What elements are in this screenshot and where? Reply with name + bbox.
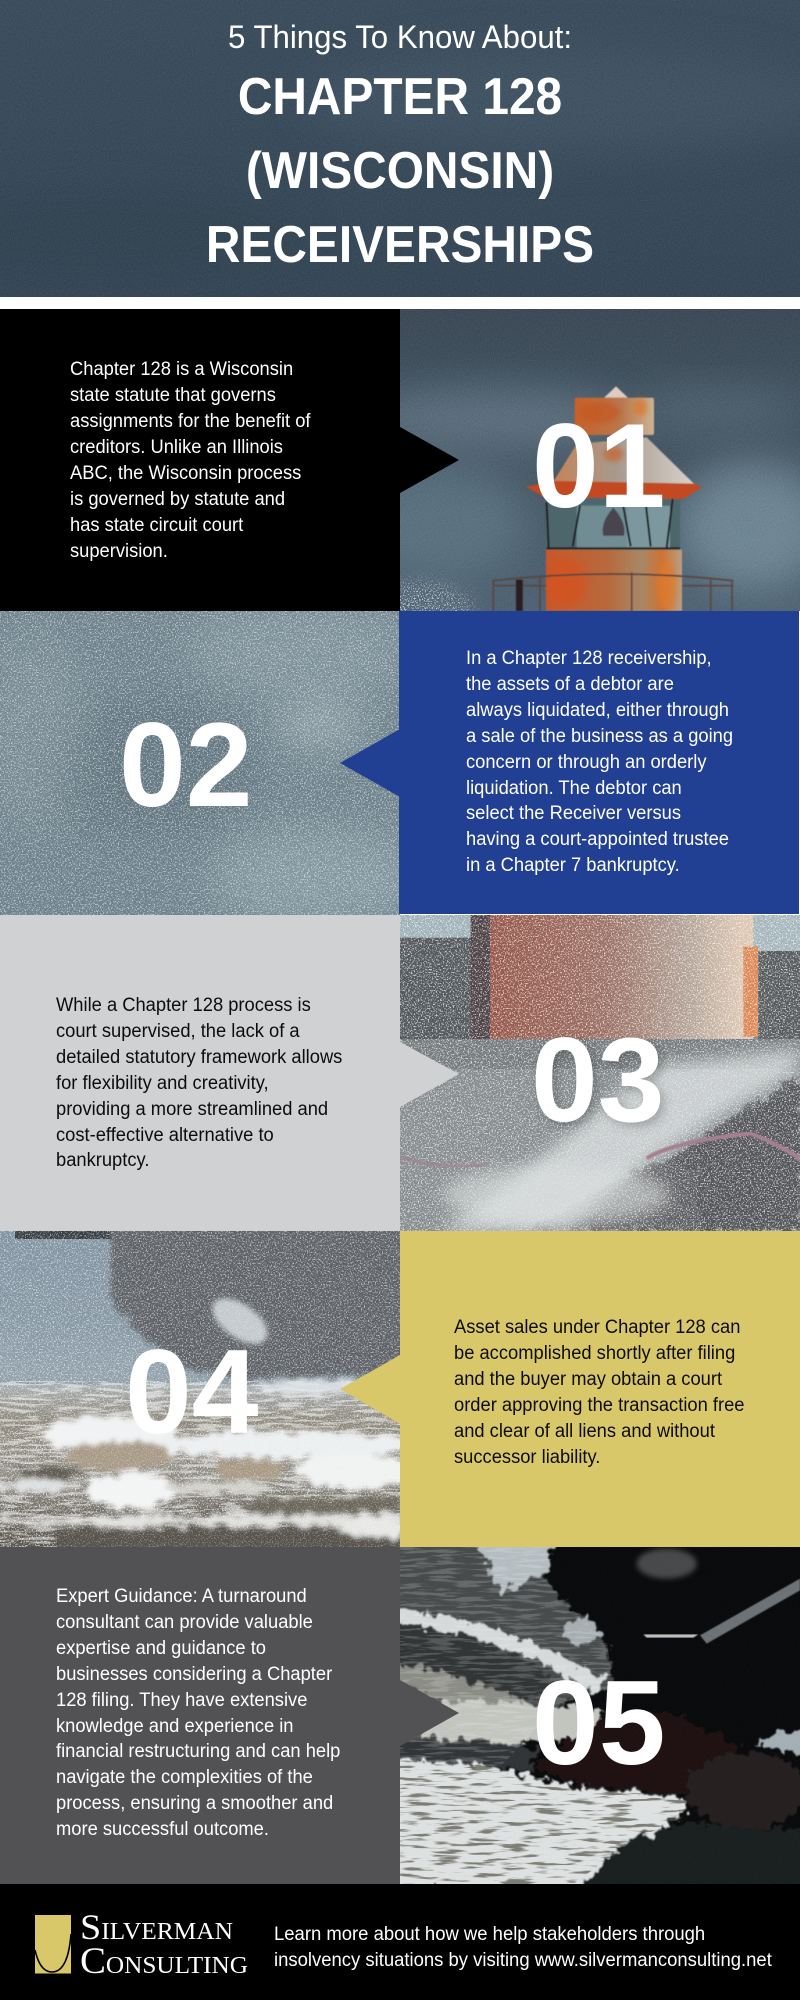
body text 05: 128 filing. They have extensive [56,1690,307,1711]
number 02: 02 [119,698,252,832]
title [206,68,594,274]
body text 04: be accomplished shortly after filing [454,1343,735,1364]
photo: rocks and white water [400,1547,800,1884]
body text 01: ABC, the Wisconsin process [70,463,301,484]
text box 03 [0,915,400,1231]
number 04: 04 [125,1325,258,1459]
footer [0,1884,800,2000]
body text 05: financial restructuring and can help [56,1741,340,1762]
body text 01: state statute that governs [70,385,276,406]
body text 05: process, ensuring a smoother and [56,1793,333,1814]
panel 04 [0,1231,800,1973]
body text 03: for flexibility and creativity, [56,1073,269,1094]
panel 03 [0,915,800,1231]
title: CHAPTER 128 [238,68,562,126]
number 01: 01 [532,399,665,533]
arrow 04 [340,1355,400,1424]
header banner [0,0,800,297]
body text 05: businesses considering a Chapter [56,1664,332,1685]
foam and waves [0,1379,413,1551]
text box 05 [0,1547,400,1884]
body text 02: liquidation. The debtor can [466,778,682,799]
subtitle: 5 Things To Know About: [228,19,572,55]
lighthouse [493,386,733,611]
panel 01 [0,309,800,611]
body text 01: has state circuit court [70,515,243,536]
photo: lighthouse base in spray [400,915,800,1231]
body text 04: order approving the transaction free [454,1395,744,1416]
body text 02: always liquidated, either through [466,700,729,721]
arrow 02 [340,730,399,796]
body text 02: a sale of the business as a going [466,726,733,747]
body text 04: and the buyer may obtain a court [454,1369,722,1390]
photo: waves at tower foot [0,1231,400,1973]
body text 02: the assets of a debtor are [466,674,674,695]
arrow 01 [400,427,459,493]
logo: Silverman Consulting [35,1910,248,1978]
body text 01: is governed by statute and [70,489,285,510]
body text 01 [70,359,311,562]
body text 03: While a Chapter 128 process is [56,995,311,1016]
body text 02: having a court-appointed trustee [466,829,729,850]
body text 02: In a Chapter 128 receivership, [466,648,712,669]
body text 05: knowledge and experience in [56,1716,294,1737]
body text 03: detailed statutory framework allows [56,1047,342,1068]
body text 04: and clear of all liens and without [454,1421,715,1442]
body text 03: court supervised, the lack of a [56,1021,300,1042]
call to action [274,1924,772,1971]
arrow 03 [400,1042,459,1107]
text box 04 [400,1231,800,1547]
body text 03: cost-effective alternative to [56,1125,274,1146]
body text 05: consultant can provide valuable [56,1612,313,1633]
body text 05: Expert Guidance: A turnaround [56,1586,307,1607]
body text 03: bankruptcy. [56,1150,149,1171]
body text 04 [454,1317,744,1468]
body text 01: assignments for the benefit of [70,411,311,432]
body text 03 [56,995,342,1171]
title: (WISCONSIN) [246,142,554,200]
body text 05 [56,1586,340,1840]
body text 02: select the Receiver versus [466,803,681,824]
body text 02 [466,648,733,876]
body text 01: supervision. [70,541,168,562]
number 03: 03 [531,1012,664,1146]
body text 05: more successful outcome. [56,1819,269,1840]
photo: sea spray [0,611,400,915]
panel 05 [0,1547,800,1973]
call to action: insolvency situations by visiting www.silvermanconsulting.net [274,1950,772,1971]
body text 03: providing a more streamlined and [56,1099,328,1120]
body text 05: navigate the complexities of the [56,1767,313,1788]
text box 02 [399,611,799,914]
body text 04: Asset sales under Chapter 128 can [454,1317,740,1338]
body text 02: concern or through an orderly [466,752,707,773]
body text 02: in a Chapter 7 bankruptcy. [466,855,680,876]
title: RECEIVERSHIPS [206,216,594,274]
text box 01 [0,309,400,611]
photo: lighthouse top [400,309,800,611]
body text 01: Chapter 128 is a Wisconsin [70,359,293,380]
arrow 05 [400,1680,459,1746]
body text 01: creditors. Unlike an Illinois [70,437,283,458]
body text 05: expertise and guidance to [56,1638,266,1659]
panel 02 [0,611,799,915]
body text 04: successor liability. [454,1447,600,1468]
call to action: Learn more about how we help stakeholders through [274,1924,705,1945]
number 05: 05 [532,1656,665,1790]
